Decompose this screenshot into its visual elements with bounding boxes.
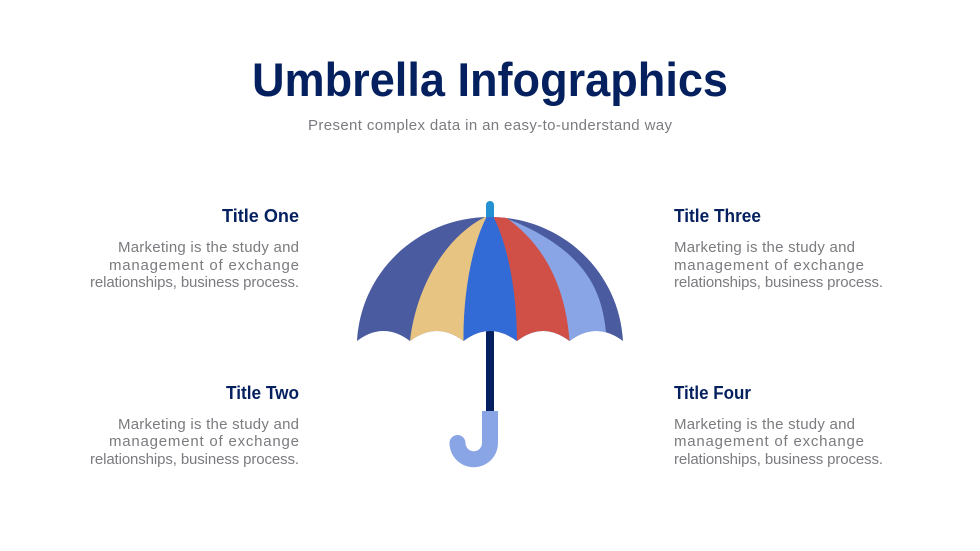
text block: title four: management of exchange (674, 433, 864, 450)
text block: title three (674, 206, 883, 291)
subtitle: Present complex data in an easy-to-understand way (308, 117, 672, 134)
umbrella canopy panels (357, 217, 623, 341)
panel: sand (410, 210, 490, 345)
text block: title three: management of exchange (674, 257, 864, 274)
text block: title three: relationships, business process. (674, 274, 883, 291)
text block: title one: Marketing is the study and (118, 239, 299, 256)
text block: title one: relationships, business process. (90, 274, 299, 291)
text block: title three: Marketing is the study and (674, 239, 855, 256)
text block: title four: Title Four (674, 383, 751, 403)
text block: title four: Marketing is the study and (674, 416, 855, 433)
text block: title one (90, 206, 299, 291)
text block: title two: relationships, business process. (90, 451, 299, 468)
text block: title two: Marketing is the study and (118, 416, 299, 433)
panel: dark blue base (357, 217, 623, 341)
title: Umbrella Infographics (252, 53, 728, 106)
panel: blue (463, 212, 517, 345)
text block: title two (90, 383, 299, 468)
panel: red (494, 212, 570, 345)
text block: title two: Title Two (226, 383, 299, 403)
panel: light blue (495, 217, 608, 345)
text block: title two: management of exchange (109, 433, 299, 450)
text block: title four: relationships, business process. (674, 451, 883, 468)
text block: title three: Title Three (674, 206, 761, 226)
icon: umbrella (350, 201, 630, 467)
text block: title one: management of exchange (109, 257, 299, 274)
text block: title one: Title One (222, 206, 299, 226)
text block: title four (674, 383, 883, 468)
umbrella shaft (486, 330, 494, 414)
umbrella tip (486, 201, 494, 218)
umbrella handle (450, 411, 498, 467)
